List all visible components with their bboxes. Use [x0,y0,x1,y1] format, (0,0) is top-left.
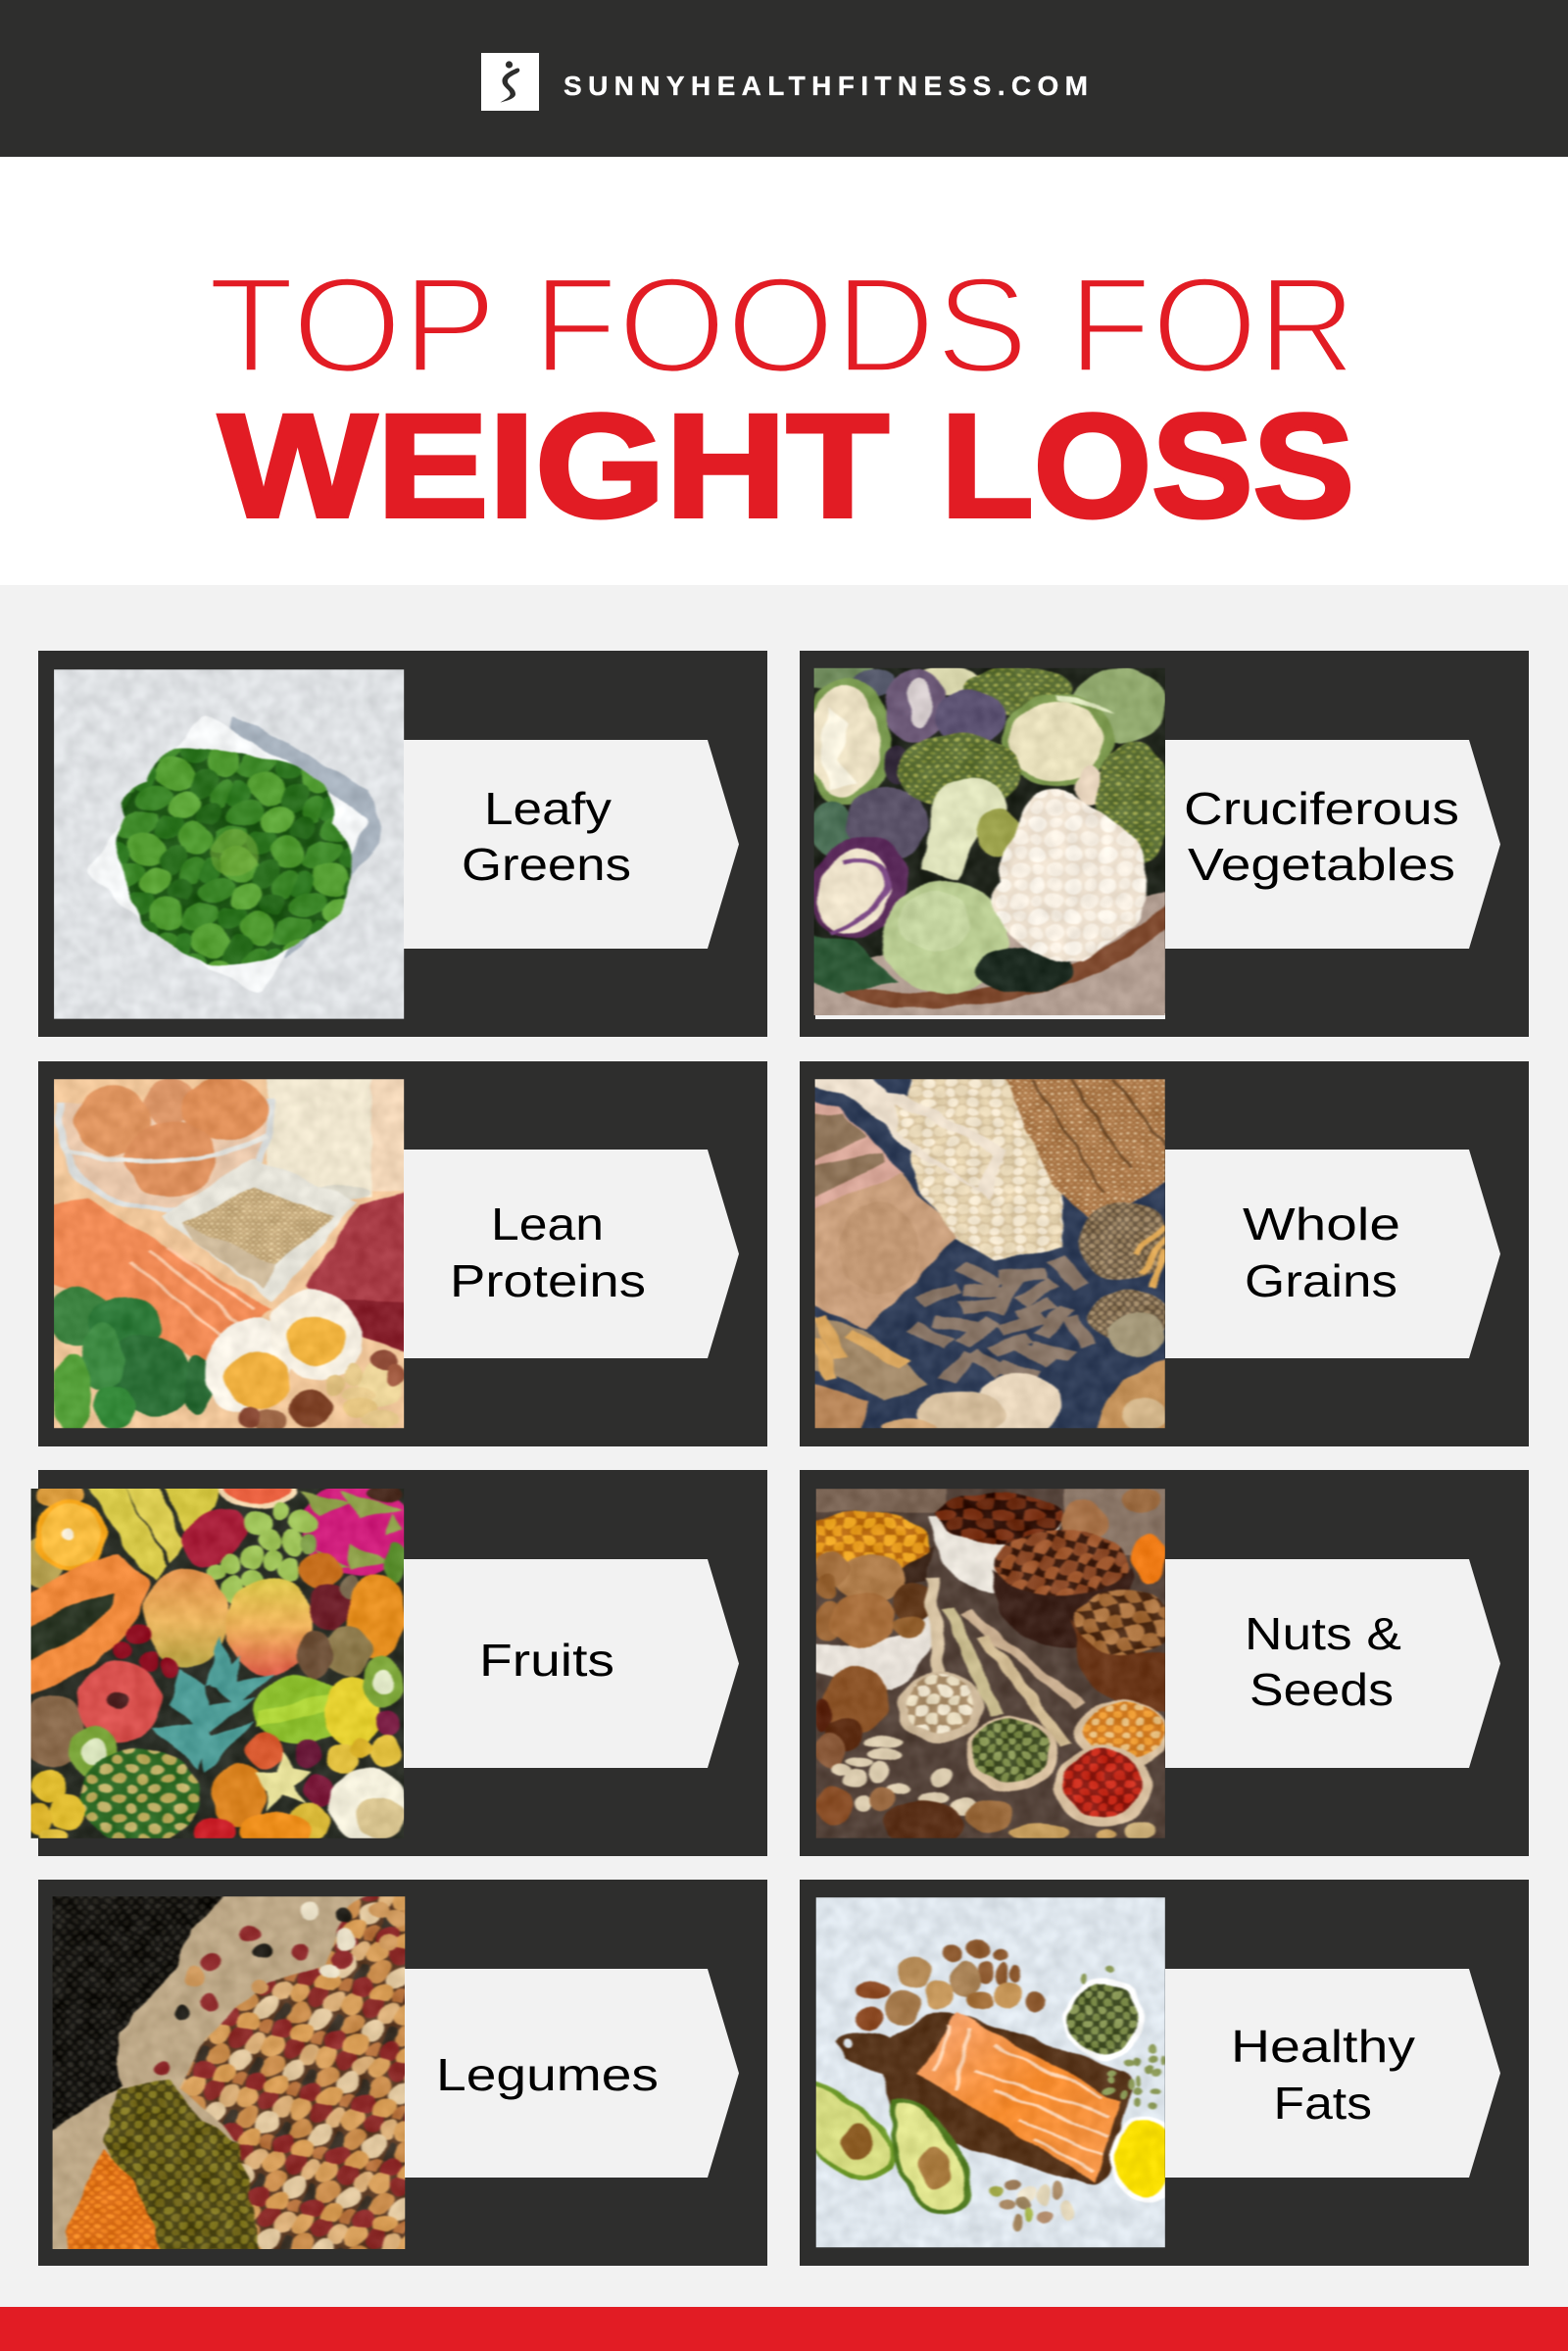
arrow label: leafy greens: Leafy [484,783,612,834]
arrow label: nuts and seeds: Seeds [1250,1664,1394,1715]
panel: healthy fats [796,1880,1529,2266]
title line 1: TOP [208,249,497,402]
title line 1: FOR [1068,249,1356,402]
photo: fruits [31,1489,404,1838]
arrow label: nuts and seeds: Nuts & [1245,1608,1401,1659]
photo: nuts and seeds [815,1489,1165,1838]
arrow label: legumes: Legumes [436,2049,659,2100]
header bar [0,0,1568,157]
photo: lean proteins [54,1079,404,1429]
photo underline [815,1013,1165,1019]
site name: SUNNYHEALTHFITNESS.COM [564,71,1088,101]
arrow label: whole grains: Whole [1243,1199,1400,1249]
arrow label: whole grains: Grains [1245,1255,1397,1306]
logo icon [481,53,539,111]
title line 2: LOSS [941,383,1354,548]
photo: whole grains [815,1079,1165,1429]
title line 1: FOODS [533,249,1029,402]
title line 1 [208,249,1356,402]
footer bar [0,2307,1568,2351]
panel: lean proteins [34,1061,767,1446]
arrow label: cruciferous vegetables: Cruciferous [1184,783,1459,834]
arrow label: fruits [404,1559,739,1768]
arrow label: healthy fats [1165,1969,1500,2178]
arrow label: legumes [405,1969,739,2178]
panel: legumes [32,1880,767,2266]
panel: nuts and seeds [796,1470,1529,1856]
arrow label: healthy fats: Fats [1274,2078,1372,2129]
panel: whole grains [795,1061,1529,1446]
photo: legumes [53,1896,406,2249]
arrow label: whole grains [1165,1150,1500,1358]
title line 2 [219,383,1354,548]
arrow label: healthy fats: Healthy [1231,2021,1415,2072]
arrow label: lean proteins [404,1150,739,1358]
arrow label: leafy greens: Greens [462,839,631,890]
panel: cruciferous vegetables [794,651,1529,1037]
arrow label: nuts and seeds [1165,1559,1500,1768]
photo: cruciferous vegetables [813,668,1165,1015]
photo: leafy greens [54,669,404,1019]
panel: fruits [11,1470,767,1856]
arrow label: leafy greens [404,740,739,949]
photo: healthy fats [815,1897,1165,2248]
title line 2: WEIGHT [219,383,889,548]
arrow label: lean proteins: Lean [491,1199,604,1249]
panel: leafy greens [34,651,767,1037]
arrow label: cruciferous vegetables: Vegetables [1188,839,1455,890]
arrow label: fruits: Fruits [479,1635,614,1686]
arrow label: lean proteins: Proteins [450,1255,646,1306]
arrow label: cruciferous vegetables [1165,740,1500,949]
title block [0,157,1568,585]
